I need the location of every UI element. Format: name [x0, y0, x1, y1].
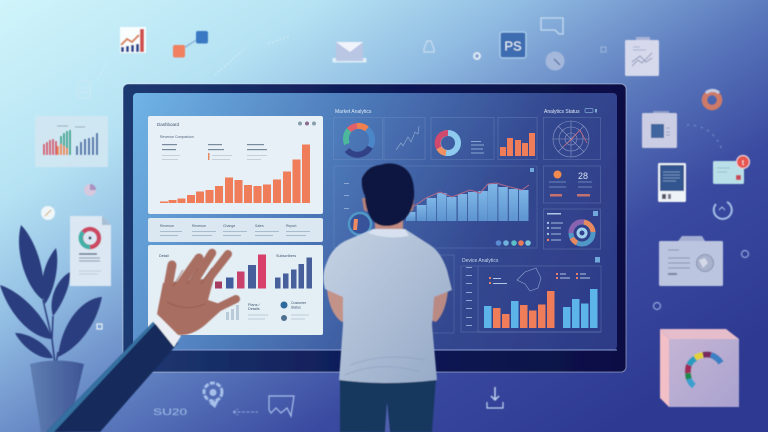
panel: stat cards: 28 [578, 171, 588, 181]
hand and arm [46, 253, 236, 432]
icon: connected nodes [173, 31, 208, 58]
icon: tablet [658, 163, 686, 202]
panel: left KPI strip [148, 218, 323, 242]
panel: line sparkline [384, 118, 425, 160]
icon: envelope [333, 42, 366, 62]
icon: flask [424, 41, 434, 52]
plant [0, 225, 102, 432]
neck [375, 218, 403, 232]
panel: left KPI strip: Sales [255, 224, 264, 228]
trousers [340, 378, 436, 432]
icon: clipboard with line chart [625, 37, 659, 76]
plant pot [30, 360, 84, 432]
monitor frame [123, 84, 626, 372]
icon: small square [97, 324, 102, 329]
panel: left KPI strip: Report [286, 224, 297, 228]
cuff [154, 318, 181, 347]
legend rows [162, 144, 267, 160]
label: SU20: SU20 [153, 407, 187, 418]
panel: stat cards [544, 166, 600, 203]
panel: main area chart [334, 166, 537, 248]
monitor [123, 84, 626, 372]
bar chart: mixed [215, 254, 266, 288]
icon: pencil badge [41, 206, 55, 220]
hand [157, 253, 236, 335]
card: bar chart [35, 116, 108, 167]
panel: left top bar chart: Revenue Comparison [160, 135, 194, 139]
panel heading: Dashboard [157, 122, 180, 127]
head hair [362, 163, 414, 226]
icon: PS tile: PS [504, 38, 522, 54]
panel: small bars [498, 118, 537, 160]
icon: faint arrow [98, 36, 290, 78]
icon: donut [704, 90, 720, 108]
icon: download [487, 387, 503, 408]
panel: bottom right bar chart [461, 257, 601, 332]
icon: clock [546, 52, 564, 70]
icon: clipboard document [642, 111, 677, 148]
floating icons: top row [78, 18, 659, 98]
panel: radar [544, 118, 600, 160]
icon: small rings [654, 250, 748, 310]
floating icons: right column [642, 90, 750, 407]
icon: faint arrow [233, 409, 258, 415]
caption: Plans / [248, 303, 261, 307]
document: donut report [70, 216, 111, 286]
icon: small orb [84, 184, 96, 196]
panel: left bottom charts: Details [248, 307, 260, 311]
bar chart: orange [160, 144, 310, 203]
icon: refresh ring [714, 202, 732, 219]
bottom icons [153, 383, 503, 418]
shirt [323, 229, 452, 383]
panel: left KPI strip: Revenue [192, 224, 206, 228]
icon: speech bubble [541, 18, 563, 34]
sleeve [46, 322, 178, 432]
caption with icons [248, 301, 309, 321]
ears [362, 198, 414, 212]
icon: mini chart [120, 27, 146, 53]
icon: 3D cube with colour ring [660, 329, 739, 407]
panel: donut [431, 118, 494, 160]
floating icons: left column [0, 116, 111, 432]
panel: left bottom charts: Detail [159, 254, 169, 258]
left arm skin [327, 290, 347, 322]
panel: left KPI strip: Change [223, 224, 235, 228]
icon: location pin [204, 383, 222, 408]
panel row: dashboard header: Market Analytics [335, 109, 372, 115]
small donut [349, 213, 371, 235]
right arm skin [430, 290, 448, 322]
panel row: dashboard header [335, 108, 597, 115]
panel: left bottom charts: Subscribers [276, 254, 296, 258]
panel row: dashboard header: Analytics Status [544, 109, 580, 115]
caption with icons: Status [291, 306, 301, 310]
legend dots [496, 240, 531, 246]
icon: ID card [659, 236, 723, 286]
panel: left KPI strip: Revenue [160, 224, 174, 228]
panel: bottom right bar chart: Device Analytics [462, 258, 499, 264]
icon: small square [601, 47, 606, 52]
bar chart: blue [275, 258, 312, 288]
icon: notification card [713, 156, 750, 184]
monitor screen [133, 93, 617, 350]
icon: notification card: t [742, 160, 744, 167]
panel: left bottom charts [148, 245, 323, 335]
axis labels [344, 183, 349, 209]
icon: chart frame [269, 396, 294, 416]
person [323, 163, 452, 432]
icon: gear [474, 53, 480, 59]
icon: PS tile [500, 32, 526, 58]
panel: left top bar chart [148, 116, 323, 214]
caption with icons: Customer [291, 301, 307, 305]
panel: lower left obscured [430, 255, 454, 333]
panel: ring legend [544, 209, 600, 249]
panel: gauge [334, 118, 382, 160]
icon: faint box [78, 79, 90, 98]
faint bars [226, 305, 239, 320]
icon: dotted arc [687, 125, 722, 150]
